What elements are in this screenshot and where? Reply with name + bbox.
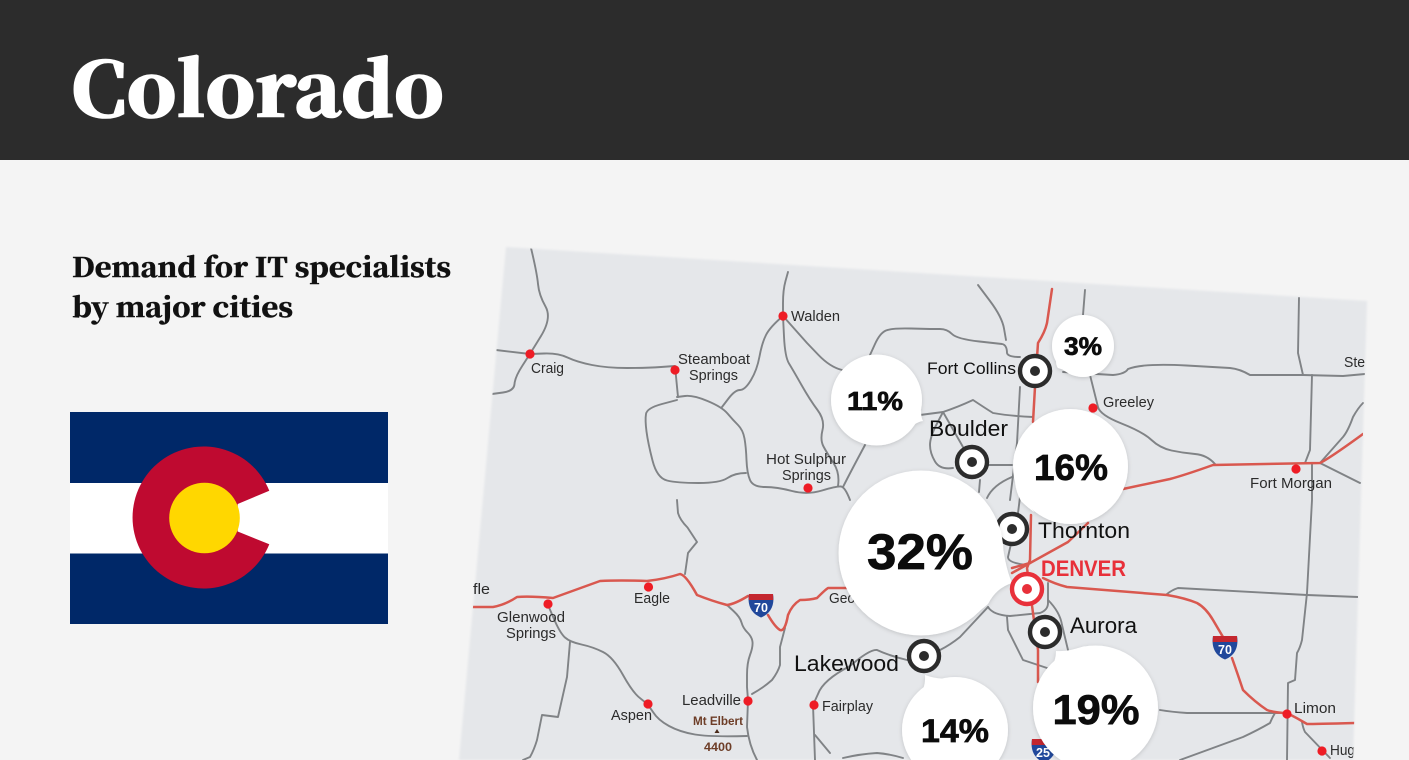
label: Ste: Ste	[1344, 354, 1365, 371]
town labels: Craig	[531, 360, 564, 377]
callout: Aurora 19%: 19%	[1052, 686, 1140, 733]
icon: interstate 70 shield east	[1213, 636, 1237, 660]
callout: Denver 32%	[838, 470, 1012, 636]
subtitle	[72, 246, 451, 325]
pin: Lakewood	[794, 641, 939, 676]
pin: Aurora	[1030, 613, 1138, 647]
town labels: Greeley	[1103, 394, 1154, 411]
town labels: Aspen	[611, 707, 652, 724]
town labels: Limon	[1294, 700, 1336, 717]
callout: Denver 32%: 32%	[867, 524, 973, 580]
callout: Boulder 11%	[831, 354, 923, 446]
town labels: Fort Morgan	[1250, 475, 1332, 492]
pin: Boulder: Boulder	[929, 416, 1008, 441]
town labels: Eagle	[634, 590, 670, 607]
icon: interstate 70 shield west	[749, 594, 773, 618]
label: Hug: Hug	[1330, 742, 1355, 759]
Mt Elbert peak label: 4400	[704, 740, 732, 754]
callout: Lakewood 14%: 14%	[921, 713, 989, 749]
pin: Thornton: Thornton	[1038, 518, 1130, 543]
pin: Aurora: Aurora	[1070, 613, 1138, 638]
callout: Fort Collins 3%: 3%	[1064, 333, 1102, 361]
callout: Fort Collins 3%	[1052, 315, 1114, 377]
callout: Aurora 19%	[1033, 646, 1158, 760]
town labels	[473, 308, 1336, 724]
subtitle: by major cities	[72, 286, 293, 325]
Mt Elbert peak label: Mt Elbert	[693, 714, 743, 728]
subtitle: Demand for IT specialists	[72, 246, 451, 285]
pin: Denver	[1012, 556, 1126, 604]
interstate highways	[472, 289, 1363, 724]
pin: Lakewood: Lakewood	[794, 651, 899, 676]
header band	[0, 0, 1409, 160]
icon: interstate 70 shield west: 70	[754, 601, 768, 615]
town labels: fle	[473, 581, 490, 598]
town labels: Fairplay	[822, 698, 873, 715]
pin: Thornton	[997, 514, 1130, 544]
town labels: Glenwood	[497, 609, 565, 626]
pin: Fort Collins: Fort Collins	[927, 359, 1016, 378]
road network	[472, 248, 1365, 760]
Mt Elbert peak label	[693, 714, 743, 754]
callout: Thornton 16%: 16%	[1034, 447, 1108, 488]
town labels: Geo	[829, 590, 855, 607]
map of Colorado	[459, 247, 1367, 760]
town labels: Leadville	[682, 692, 741, 709]
title: Colorado	[71, 32, 444, 138]
flag of Colorado	[70, 412, 388, 624]
pin: Denver: DENVER	[1041, 556, 1126, 581]
pin: Boulder	[929, 416, 1008, 477]
town labels: Steamboat	[678, 351, 751, 368]
town labels: Springs	[506, 625, 556, 642]
icon: interstate 25 shield	[1032, 739, 1056, 760]
town dots	[525, 311, 1327, 756]
icon: interstate 70 shield east: 70	[1218, 643, 1232, 657]
town labels: Hot Sulphur	[766, 451, 846, 468]
town labels: Springs	[782, 467, 831, 484]
town labels: Walden	[791, 308, 840, 325]
icon: interstate 25 shield: 25	[1036, 746, 1050, 760]
town labels: Springs	[689, 367, 738, 384]
pin: Fort Collins	[927, 356, 1050, 386]
callout: Thornton 16%	[1013, 409, 1128, 524]
callout: Boulder 11%: 11%	[847, 386, 903, 416]
callout: Lakewood 14%	[902, 675, 1008, 760]
